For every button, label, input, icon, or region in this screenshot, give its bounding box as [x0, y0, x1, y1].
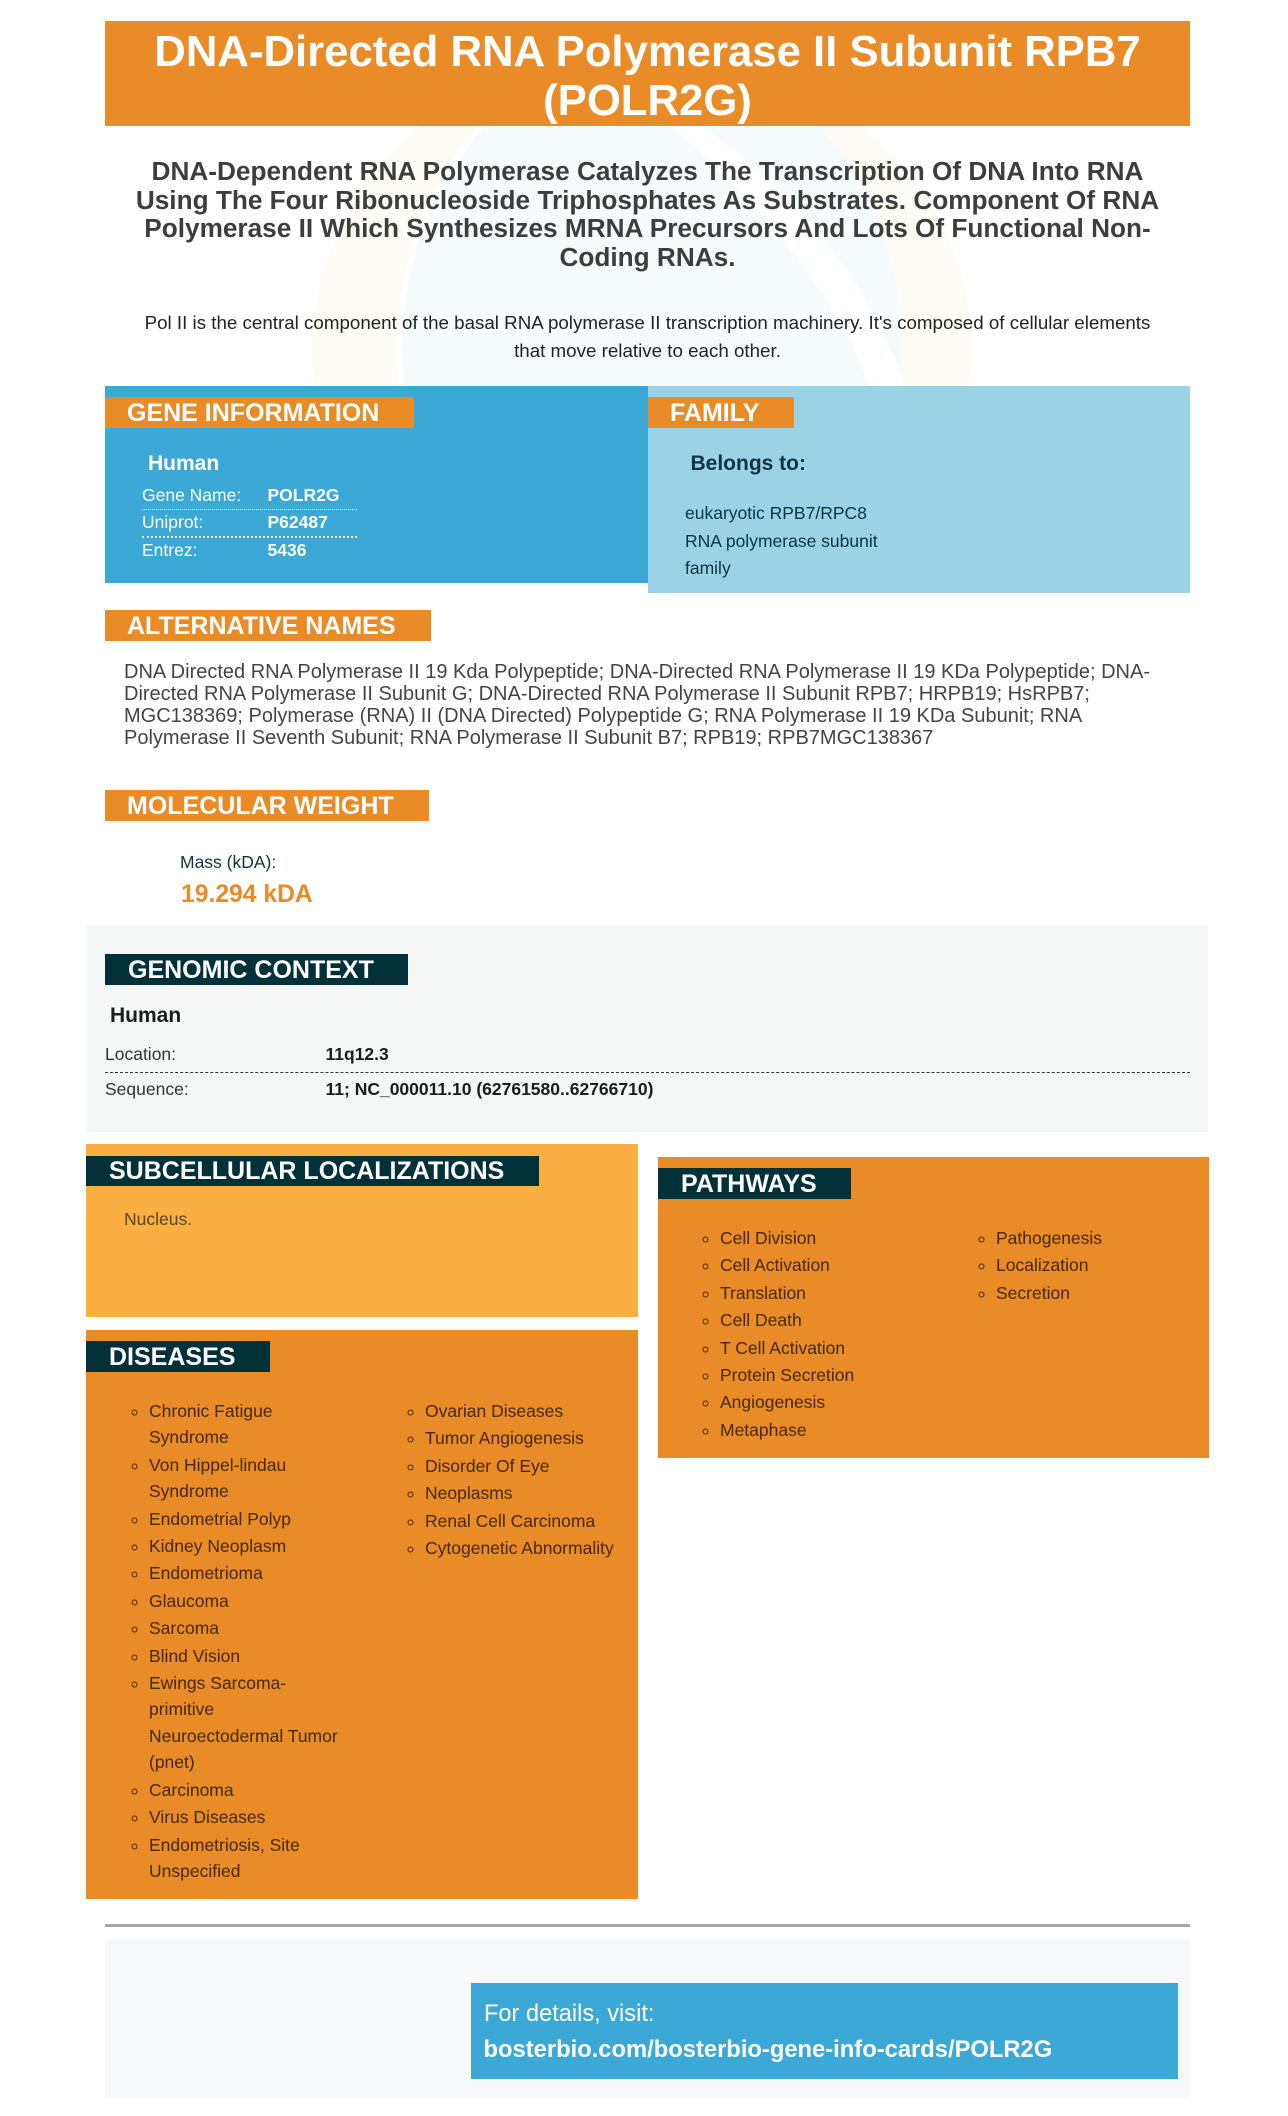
disease list column 1: Endometrioma — [149, 1563, 263, 1583]
panel: diseases — [86, 1330, 638, 1899]
disease list column 1: Virus Diseases — [149, 1807, 265, 1827]
pathway list column 1: Angiogenesis — [720, 1392, 825, 1412]
disease list column 1: Carcinoma — [149, 1780, 234, 1800]
heading: family: FAMILY — [670, 399, 759, 427]
disease list column 1: Syndrome — [149, 1481, 229, 1501]
heading: gene information: GENE INFORMATION — [127, 399, 379, 427]
family text — [685, 503, 878, 578]
heading: diseases: DISEASES — [109, 1343, 235, 1371]
uniprot row: P62487 — [268, 512, 328, 532]
intro paragraph: Pol II is the central component of the basal RNA polymerase II transcription machinery. It's composed of cellular elements — [145, 312, 1150, 332]
location row: Location: — [105, 1044, 176, 1064]
callout label: For details, visit: — [484, 2001, 654, 2027]
heading: pathways — [658, 1168, 851, 1199]
subtitle description: Using The Four Ribonucleoside Triphosphates As Substrates. Component Of RNA — [136, 185, 1159, 215]
disease list column 2: Neoplasms — [425, 1483, 513, 1503]
entrez row: Entrez: — [142, 540, 197, 560]
alternative names text: DNA Directed RNA Polymerase II 19 Kda Polypeptide; DNA-Directed RNA Polymerase II 19 KDa Polypeptide; DNA- — [124, 661, 1150, 683]
alternative names text: Polymerase II Seventh Subunit; RNA Polymerase II Subunit B7; RPB19; RPB7MGC138367 — [124, 727, 933, 749]
mass value: 19.294 kDA — [181, 880, 313, 908]
pathway list column 1: Cell Death — [720, 1310, 802, 1330]
heading: molecular weight: MOLECULAR WEIGHT — [127, 792, 394, 820]
species label: Human — [148, 452, 219, 475]
panel: subcellular localizations — [86, 1144, 638, 1317]
sequence row — [105, 1079, 653, 1099]
panel: family — [648, 386, 1190, 593]
mass label: Mass (kDA): — [180, 852, 276, 872]
subtitle description — [136, 156, 1159, 272]
pathway list column 1: Cell Activation — [720, 1255, 830, 1275]
disease list column 1: Chronic Fatigue — [149, 1401, 273, 1421]
disease list column 1: Glaucoma — [149, 1591, 229, 1611]
disease list column 2: Disorder Of Eye — [425, 1456, 549, 1476]
alternative names text: Directed RNA Polymerase II Subunit G; DNA-Directed RNA Polymerase II Subunit RPB7; HRPB19; HsRPB7; — [124, 683, 1090, 705]
family text: eukaryotic RPB7/RPC8 — [685, 503, 867, 523]
disease list column 1: Sarcoma — [149, 1618, 219, 1638]
pathway list column 1: Translation — [720, 1283, 806, 1303]
disease list column 1: Syndrome — [149, 1427, 229, 1447]
entrez row: 5436 — [268, 540, 306, 560]
disease list column 2: Cytogenetic Abnormality — [425, 1538, 614, 1558]
pathway list column 1: T Cell Activation — [720, 1338, 845, 1358]
footer panel — [105, 1939, 1190, 2098]
title banner: DNA-Directed RNA Polymerase II Subunit RPB7 — [154, 27, 1141, 76]
location row: 11q12.3 — [326, 1044, 389, 1064]
heading: subcellular localizations: SUBCELLULAR LOCALIZATIONS — [109, 1157, 504, 1185]
uniprot row — [142, 512, 357, 538]
sequence row: 11; NC_000011.10 (62761580..62766710) — [326, 1079, 653, 1099]
family text: RNA polymerase subunit — [685, 530, 878, 550]
localization text: Nucleus. — [124, 1209, 192, 1229]
heading: diseases — [86, 1341, 270, 1372]
heading: genomic context: GENOMIC CONTEXT — [128, 956, 374, 984]
disease list column 1: Unspecified — [149, 1861, 240, 1881]
title banner: (POLR2G) — [543, 76, 752, 125]
pathway list column 1: Metaphase — [720, 1420, 807, 1440]
intro paragraph: that move relative to each other. — [514, 340, 781, 361]
sequence row: Sequence: — [105, 1079, 189, 1099]
heading: alternative names: ALTERNATIVE NAMES — [127, 612, 396, 640]
species label: Human — [110, 1004, 181, 1027]
title banner — [105, 21, 1190, 126]
heading: pathways: PATHWAYS — [681, 1170, 817, 1198]
disease list column 1: Ewings Sarcoma- — [149, 1673, 286, 1693]
disease list column 1: Von Hippel-lindau — [149, 1455, 286, 1475]
pathway list column 2 — [978, 1228, 1102, 1303]
belongs to label: Belongs to: — [690, 452, 806, 475]
pathway list column 2: Secretion — [996, 1283, 1070, 1303]
disease list column 1: primitive — [149, 1699, 214, 1719]
intro paragraph — [145, 312, 1150, 361]
pathway list column 2: Pathogenesis — [996, 1228, 1102, 1248]
disease list column 1: Endometriosis, Site — [149, 1834, 300, 1854]
subtitle description: Coding RNAs. — [559, 242, 736, 272]
subtitle description: DNA-Dependent RNA Polymerase Catalyzes The Transcription Of DNA Into RNA — [152, 156, 1143, 186]
pathway list column 2: Localization — [996, 1255, 1088, 1275]
disease list column 1: (pnet) — [149, 1752, 195, 1772]
pathway list column 1 — [702, 1228, 854, 1440]
disease list column 2 — [408, 1401, 614, 1558]
heading: family — [648, 397, 794, 428]
gene name row: Gene Name: — [142, 485, 241, 505]
panel: pathways — [658, 1157, 1209, 1458]
family text: family — [685, 558, 731, 578]
disease list column 2: Tumor Angiogenesis — [425, 1428, 584, 1448]
uniprot row: Uniprot: — [142, 512, 203, 532]
alternative names text: MGC138369; Polymerase (RNA) II (DNA Directed) Polypeptide G; RNA Polymerase II 19 KDa Subunit; RNA — [124, 705, 1082, 727]
location row — [105, 1044, 1190, 1073]
disease list column 1: Neuroectodermal Tumor — [149, 1726, 338, 1746]
disease list column 2: Ovarian Diseases — [425, 1401, 563, 1421]
gene name row: POLR2G — [268, 485, 339, 505]
entrez row — [142, 540, 306, 560]
pathway list column 1: Protein Secretion — [720, 1365, 854, 1385]
disease list column 1: Blind Vision — [149, 1646, 240, 1666]
disease list column 1: Kidney Neoplasm — [149, 1536, 286, 1556]
callout url: bosterbio.com/bosterbio-gene-info-cards/POLR2G — [484, 2036, 1052, 2063]
gene name row — [142, 485, 357, 510]
callout: details link — [471, 1983, 1178, 2079]
disease list column 1: Endometrial Polyp — [149, 1509, 291, 1529]
panel: gene information — [105, 386, 648, 583]
pathway list column 1: Cell Division — [720, 1228, 816, 1248]
disease list column 2: Renal Cell Carcinoma — [425, 1511, 595, 1531]
disease list column 1 — [132, 1401, 338, 1881]
alternative names text — [124, 661, 1150, 749]
background watermark logo — [312, 126, 972, 386]
panel: genomic context — [86, 925, 1208, 1132]
subtitle description: Polymerase II Which Synthesizes MRNA Precursors And Lots Of Functional Non- — [144, 213, 1151, 243]
